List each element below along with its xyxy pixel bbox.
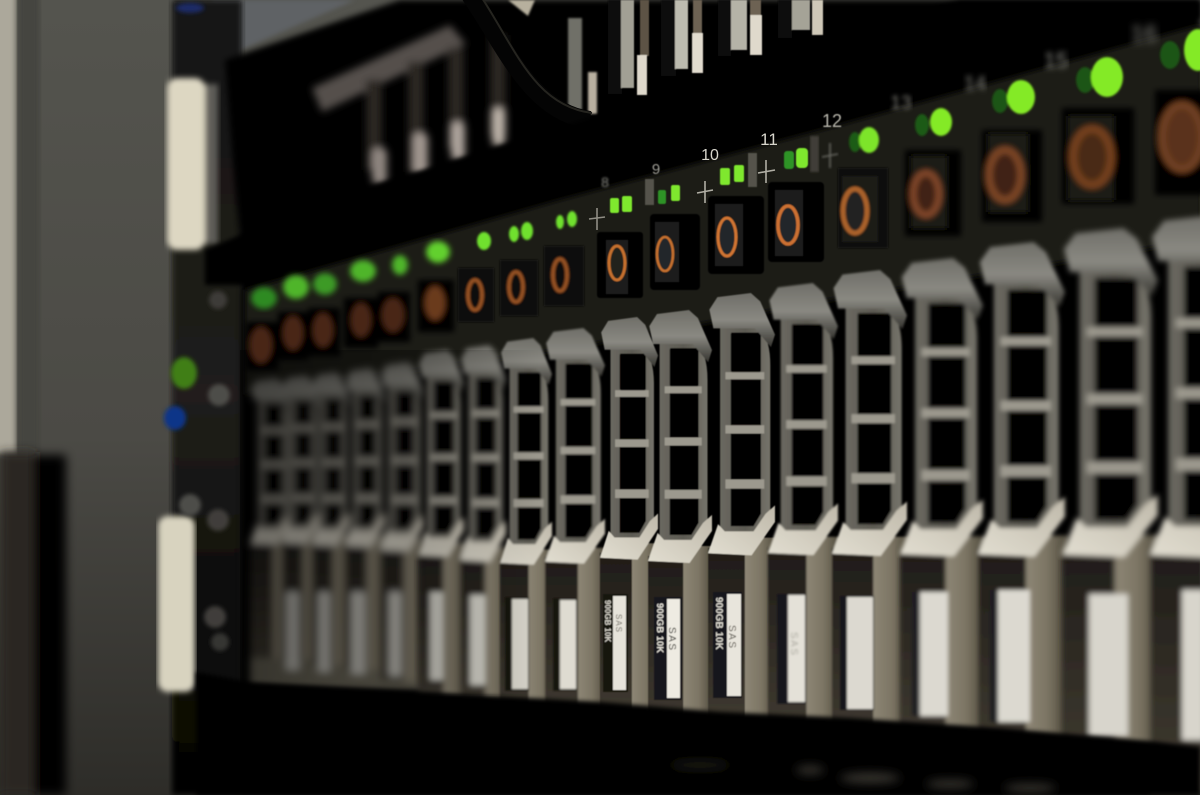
label bay 12: SAS — [726, 625, 737, 650]
drive bay 5 — [380, 362, 426, 681]
upper server row, blurred handles — [312, 25, 506, 184]
drive bay 2 — [282, 375, 322, 660]
label bay 11: SAS — [666, 627, 677, 652]
bay number 12: 12 — [822, 111, 842, 131]
left pale door edge — [0, 0, 16, 454]
drive bay 15 — [900, 258, 986, 761]
drive bay 17 — [1062, 228, 1162, 783]
drive bay 13 — [768, 283, 841, 742]
drive bay 10 — [600, 317, 660, 726]
label bay 10: 900GB 10K — [603, 600, 612, 642]
bay number 8: 8 — [601, 174, 609, 190]
label bay 18 — [1182, 590, 1200, 740]
drive tray pockets and rings: near — [838, 168, 888, 248]
mid labels — [430, 592, 485, 685]
bay number 15: 15 — [1044, 48, 1068, 73]
drive bay 1 — [250, 378, 294, 658]
drive tray latch bars — [645, 136, 819, 205]
plus marks — [589, 143, 838, 230]
mid left drives — [418, 345, 508, 710]
orange ring, bay 12 — [718, 218, 736, 256]
upper drive A — [608, 0, 649, 95]
base rail — [196, 672, 1200, 795]
bay number 10: 10 — [701, 147, 719, 164]
drive bay 12 — [708, 293, 778, 735]
drive bay 9 — [545, 328, 607, 725]
label bay 12: 900GB 10K — [713, 597, 724, 651]
drive bay 16 — [978, 242, 1068, 773]
label bay 10: SAS — [614, 614, 623, 633]
background grey wedge above rack — [212, 0, 355, 58]
far drive lower extension — [250, 630, 430, 690]
label bay 8 — [505, 597, 529, 691]
front panel band — [245, 25, 1200, 395]
status LEDs: focus — [610, 148, 808, 213]
label bay 14 — [840, 596, 874, 710]
bay number 13: 13 — [890, 93, 912, 114]
cable highlight — [482, 0, 592, 113]
drive tray pockets and rings: focus — [597, 182, 824, 298]
upper drive D — [778, 0, 823, 38]
drive bay 4 — [345, 368, 387, 670]
drive tray pockets and rings: far — [246, 280, 454, 370]
far left drives — [250, 362, 430, 690]
depth fade over far drives — [240, 350, 540, 695]
drive bay 3 — [312, 372, 352, 665]
orange ring, bay 10 — [609, 246, 625, 280]
left foreground dark block — [0, 452, 66, 795]
drive bay 14 — [832, 270, 910, 752]
drive bay 11 — [648, 310, 715, 737]
rack control column — [172, 0, 242, 795]
drive bay 8 — [500, 338, 554, 720]
black rail between server rows — [205, 0, 1200, 285]
left dim edge shade — [18, 0, 40, 452]
drive tray pockets and rings: mid — [458, 246, 584, 322]
black cable — [468, 0, 590, 120]
bay number 11: 11 — [760, 130, 778, 149]
label bay 13: SAS — [788, 632, 799, 657]
drive bay 18 — [1150, 215, 1200, 793]
status LEDs: mid — [477, 211, 577, 250]
bay number 14: 14 — [964, 73, 986, 95]
status LEDs: near — [849, 29, 1200, 153]
bay number 16: 16 — [1131, 21, 1157, 48]
label bay 12 — [713, 592, 742, 698]
left ear strip: lower — [158, 516, 195, 692]
orange ring, bay 13 — [778, 206, 798, 244]
left ear strip: upper — [167, 78, 218, 250]
label bay 16 — [990, 590, 1030, 722]
label bay 11 — [654, 597, 682, 700]
far labels — [286, 592, 401, 676]
label bay 13 — [777, 594, 806, 704]
sharp focus drives — [600, 293, 778, 737]
control panel LEDs and buttons — [164, 3, 230, 651]
bay number 9: 9 — [652, 161, 660, 178]
upper drive labels — [508, 0, 597, 114]
upper drive C — [718, 0, 762, 56]
bay numbers and plus marks — [589, 21, 1157, 230]
base rail sheen — [670, 761, 1056, 792]
label bay 9 — [553, 598, 576, 691]
status LEDs: far — [251, 241, 450, 309]
drive bay 6 — [418, 350, 466, 698]
label bay 15 — [912, 592, 948, 716]
label bay 10 — [603, 594, 628, 692]
upper drive B — [661, 0, 703, 76]
label bay 11: 900GB 10K — [654, 603, 665, 653]
orange ring, bay 11 — [657, 237, 673, 271]
label bay 17 — [1089, 594, 1128, 736]
drive bay 7 — [460, 345, 508, 710]
